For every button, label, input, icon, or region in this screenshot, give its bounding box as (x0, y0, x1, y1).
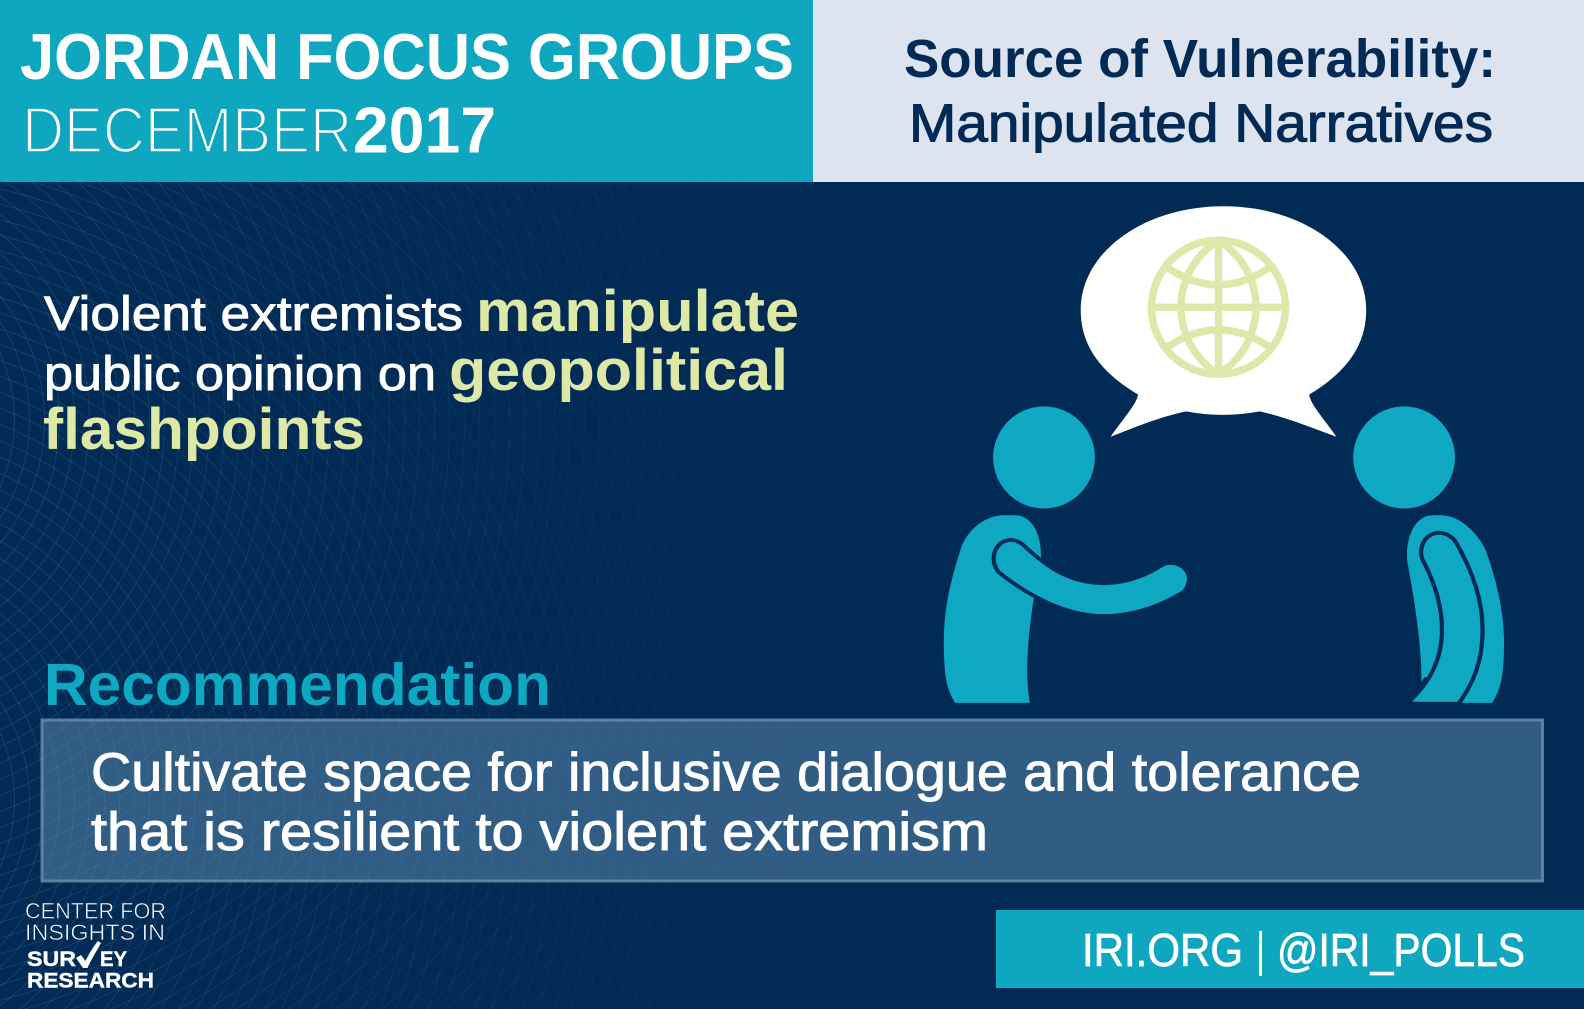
logo: center for insights in survey research: CENTER FOR (25, 898, 166, 923)
logo: center for insights in survey research (25, 898, 166, 992)
title: Jordan Focus Groups: JORDAN FOCUS GROUPS (20, 20, 794, 93)
icon: globe (1152, 240, 1286, 374)
heading: recommendation: Recommendation (44, 652, 551, 718)
figure: right person (1353, 406, 1504, 704)
logo: center for insights in survey research: SUR (27, 948, 76, 971)
icon: check mark (76, 941, 101, 968)
text block: key finding: public opinion on (44, 348, 436, 401)
text: recommendation line 1: Cultivate space for inclusive dialogue and tolerance (91, 742, 1361, 802)
text block: key finding: geopolitical (449, 338, 788, 403)
text block: key finding: flashpoints (43, 397, 365, 462)
date: December 2017: DECEMBER (22, 94, 352, 166)
text: recommendation line 2: that is resilient to violent extremism (91, 802, 988, 862)
heading: source of vulnerability: Source of Vulnerability: (904, 29, 1496, 89)
figure: left person (944, 406, 1189, 703)
panel: source of vulnerability (813, 0, 1584, 182)
logo: center for insights in survey research: INSIGHTS IN (25, 920, 165, 945)
logo: center for insights in survey research: RESEARCH (27, 969, 154, 992)
logo: center for insights in survey research: EY (100, 948, 127, 971)
subheading: manipulated narratives: Manipulated Narratives (909, 94, 1493, 154)
text block: key finding: Violent extremists (44, 288, 463, 341)
panel: footer contact bar (996, 910, 1584, 988)
text block: key finding (43, 279, 799, 462)
panel: header title (0, 0, 813, 182)
text block: key finding: manipulate (476, 279, 799, 344)
date: December 2017: 2017 (353, 94, 496, 166)
divider bar (1259, 931, 1262, 976)
icon: speech bubble (1081, 206, 1366, 437)
panel: recommendation box (42, 720, 1542, 881)
illustration: two people talking (944, 206, 1504, 704)
text: twitter handle: @IRI_POLLS (1277, 924, 1525, 976)
text: website: IRI.ORG (1082, 924, 1243, 976)
